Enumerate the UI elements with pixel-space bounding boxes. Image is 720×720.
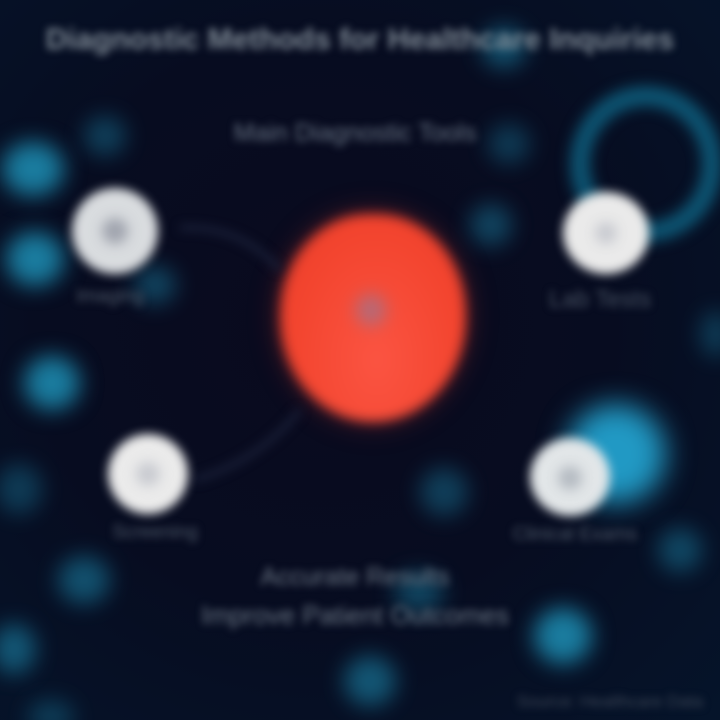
label: upper right: Lab Tests <box>549 286 651 313</box>
node: lower right <box>522 430 618 524</box>
subtitle: Main Diagnostic Tools <box>234 119 476 147</box>
footer note: Source: Healthcare Data <box>517 692 703 711</box>
label: lower left: Screening <box>112 522 198 543</box>
label: lower right: Clinical Exams <box>513 524 637 545</box>
node: lower left <box>100 426 196 522</box>
node: upper left <box>64 180 166 282</box>
label: upper left: Imaging <box>76 286 144 307</box>
node: upper right <box>555 184 657 282</box>
caption: Accurate Results <box>261 563 449 591</box>
node icon <box>102 218 128 244</box>
node icon <box>558 466 582 490</box>
brain centre marker <box>356 294 386 326</box>
ring: upper right <box>570 86 720 242</box>
central brain: red <box>280 214 466 422</box>
large teal glow: lower right <box>566 404 666 504</box>
node icon <box>595 222 617 244</box>
node icon <box>136 462 160 486</box>
title: Diagnostic Methods for Healthcare Inquiries <box>46 23 674 56</box>
caption: Improve Patient Outcomes <box>201 600 509 630</box>
caption <box>199 563 511 631</box>
